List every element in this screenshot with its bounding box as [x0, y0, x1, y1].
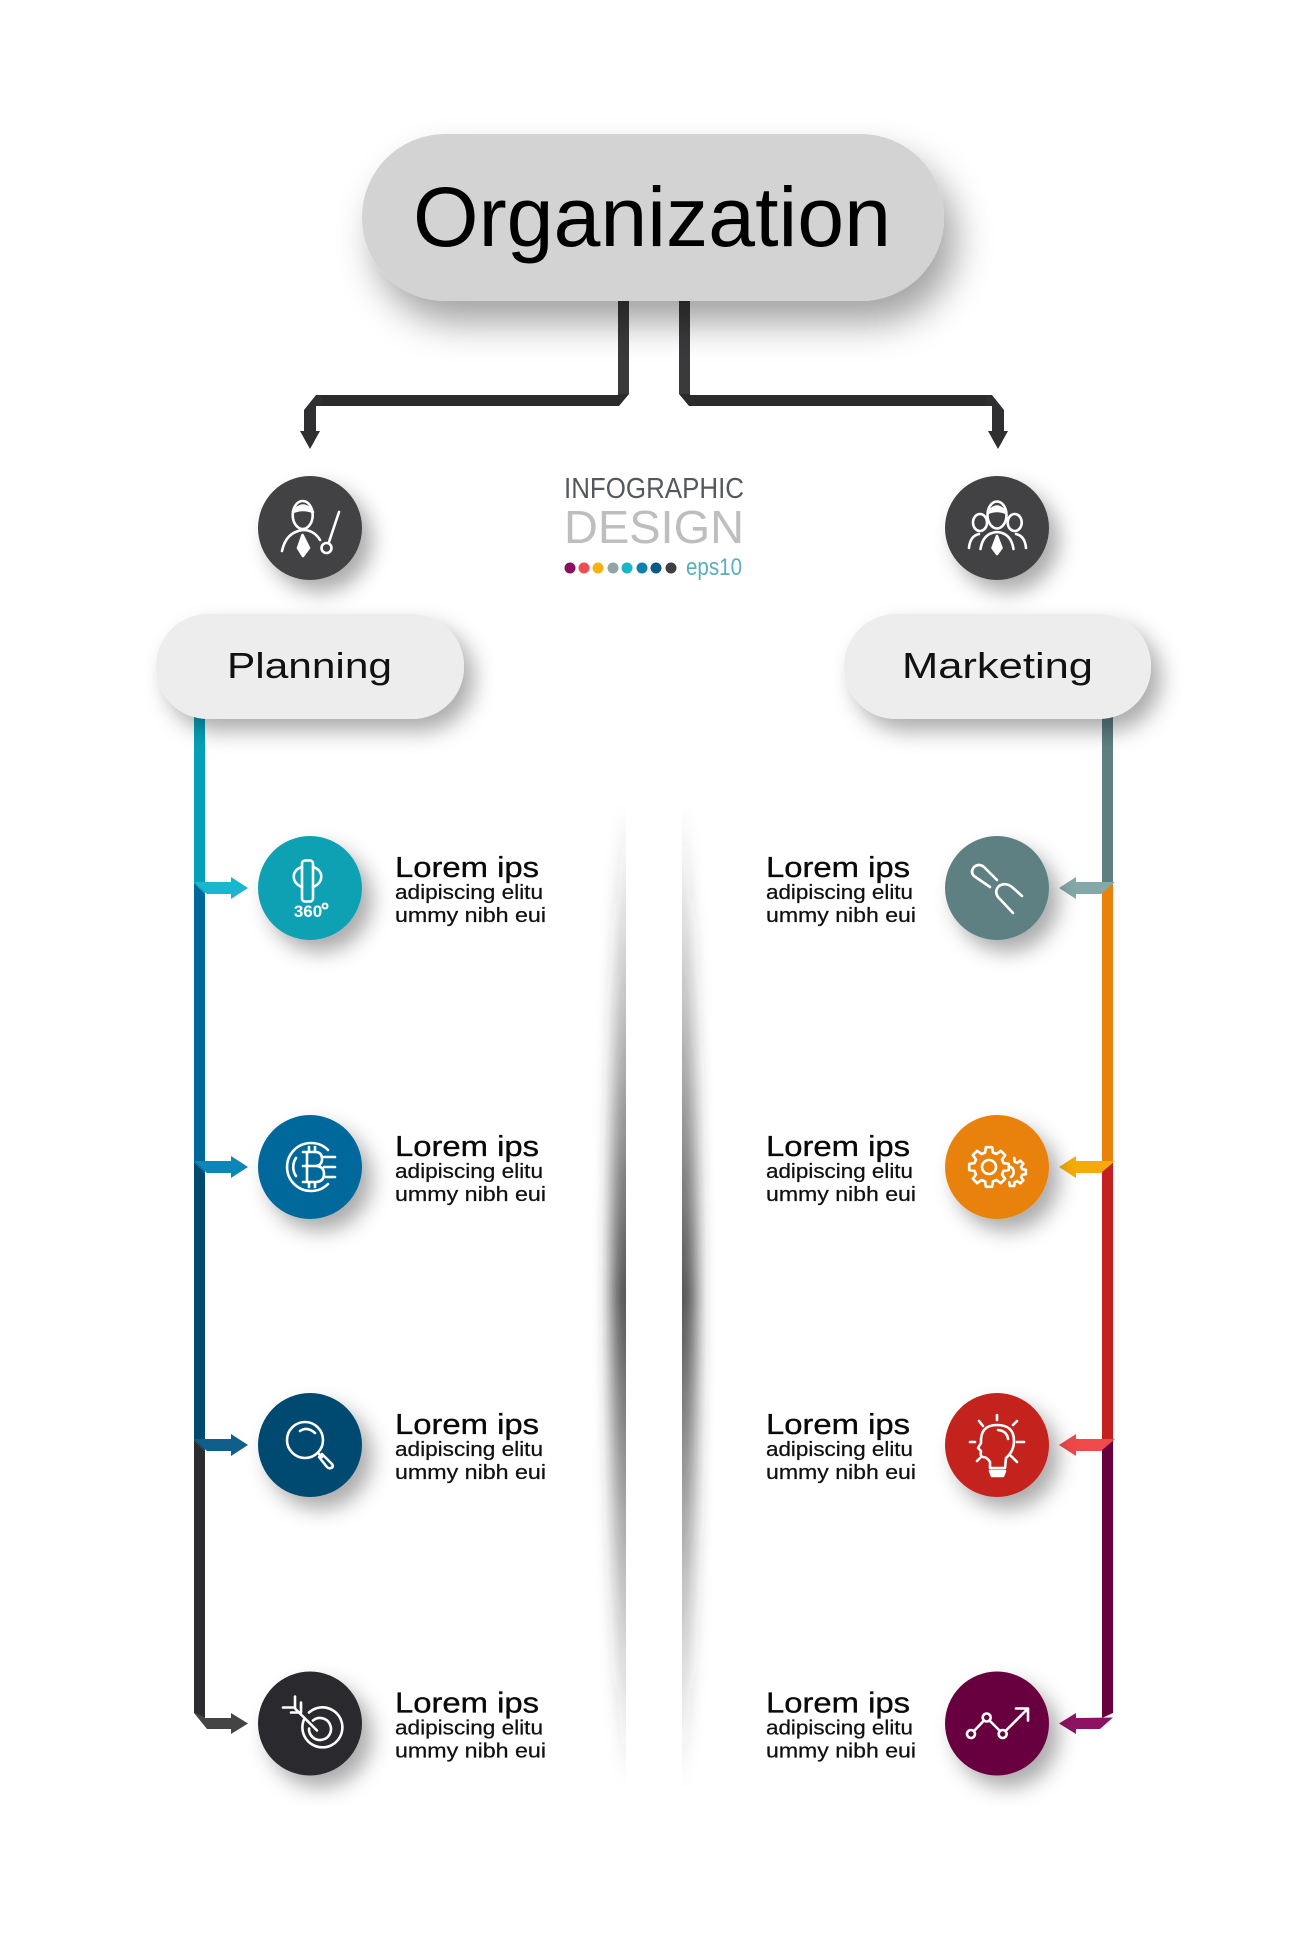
- icon: link: [945, 836, 1049, 940]
- icon: 360: 360: [294, 902, 322, 921]
- icon: lightbulb head: [945, 1393, 1049, 1497]
- row: planning 1: [194, 836, 546, 940]
- text: [766, 1131, 916, 1206]
- icon: bitcoin: [258, 1115, 362, 1219]
- text: [395, 1131, 546, 1206]
- icon: marketing team: [945, 476, 1049, 580]
- text: Lorem ips: [766, 1131, 910, 1163]
- title text: Organization: [413, 170, 891, 264]
- text: [395, 1409, 546, 1484]
- arrow: [1059, 1713, 1113, 1734]
- text: Lorem ips: [766, 852, 910, 884]
- panel: marketing heading: [844, 614, 1151, 719]
- arrow: [1059, 877, 1115, 899]
- text: adipiscing elitu: [766, 1718, 913, 1740]
- panel: planning heading: [156, 614, 464, 719]
- text: ummy nibh eui: [395, 905, 546, 927]
- heading: planning: Planning: [227, 645, 392, 686]
- text: Lorem ips: [395, 1131, 539, 1163]
- text: adipiscing elitu: [395, 1718, 543, 1740]
- icon: planning presenter: [258, 476, 362, 580]
- logo: infographic design eps10: DESIGN: [564, 501, 744, 553]
- row: marketing 3: [766, 1393, 1115, 1497]
- row: planning 2: [194, 1115, 546, 1219]
- text: adipiscing elitu: [395, 1161, 543, 1183]
- arrow: [194, 1713, 248, 1734]
- row: marketing 4: [766, 1672, 1113, 1776]
- rail: planning: [194, 715, 205, 1718]
- arrow: organization to marketing: [679, 295, 1008, 449]
- center divider: right shadow: [682, 836, 710, 1754]
- icon: 360: [258, 836, 362, 940]
- icon: magnifier: [258, 1393, 362, 1497]
- text: [395, 1688, 546, 1762]
- text: ummy nibh eui: [766, 1740, 916, 1762]
- row: marketing 1: [766, 836, 1115, 940]
- text: ummy nibh eui: [395, 1462, 546, 1484]
- text: adipiscing elitu: [395, 882, 543, 904]
- text: [395, 852, 546, 927]
- row: planning 4: [194, 1672, 546, 1776]
- logo: infographic design eps10: INFOGRAPHIC: [564, 473, 744, 505]
- icon: gears: [945, 1115, 1049, 1219]
- text: ummy nibh eui: [395, 1740, 546, 1762]
- title pill: [362, 134, 944, 301]
- text: adipiscing elitu: [766, 1439, 913, 1461]
- text: Lorem ips: [395, 1688, 539, 1720]
- text: adipiscing elitu: [766, 882, 913, 904]
- text: Lorem ips: [395, 852, 539, 884]
- text: adipiscing elitu: [766, 1161, 913, 1183]
- rail: marketing: [1102, 715, 1113, 1718]
- text: ummy nibh eui: [766, 905, 916, 927]
- row: planning 3: [194, 1393, 546, 1497]
- text: Lorem ips: [395, 1409, 539, 1441]
- center divider: left shadow: [598, 836, 626, 1754]
- logo: infographic design eps10: eps10: [686, 554, 742, 581]
- arrow: [1059, 1156, 1115, 1178]
- text: ummy nibh eui: [766, 1462, 916, 1484]
- arrow: [1059, 1434, 1115, 1456]
- infographic canvas: [154, 133, 1174, 1799]
- arrow: [194, 1434, 248, 1456]
- icon: target: [258, 1672, 362, 1776]
- heading: marketing: Marketing: [902, 645, 1093, 686]
- arrow: organization to planning: [300, 295, 629, 449]
- text: adipiscing elitu: [395, 1439, 543, 1461]
- text: [766, 852, 916, 927]
- icon: growth chart: [945, 1672, 1049, 1776]
- text: ummy nibh eui: [395, 1184, 546, 1206]
- text: [766, 1409, 916, 1484]
- text: Lorem ips: [766, 1409, 910, 1441]
- arrow: [194, 1156, 248, 1178]
- arrow: [194, 877, 248, 899]
- text: [766, 1688, 916, 1762]
- row: marketing 2: [766, 1115, 1115, 1219]
- logo: infographic design eps10: [564, 473, 744, 581]
- text: ummy nibh eui: [766, 1184, 916, 1206]
- text: Lorem ips: [766, 1688, 910, 1720]
